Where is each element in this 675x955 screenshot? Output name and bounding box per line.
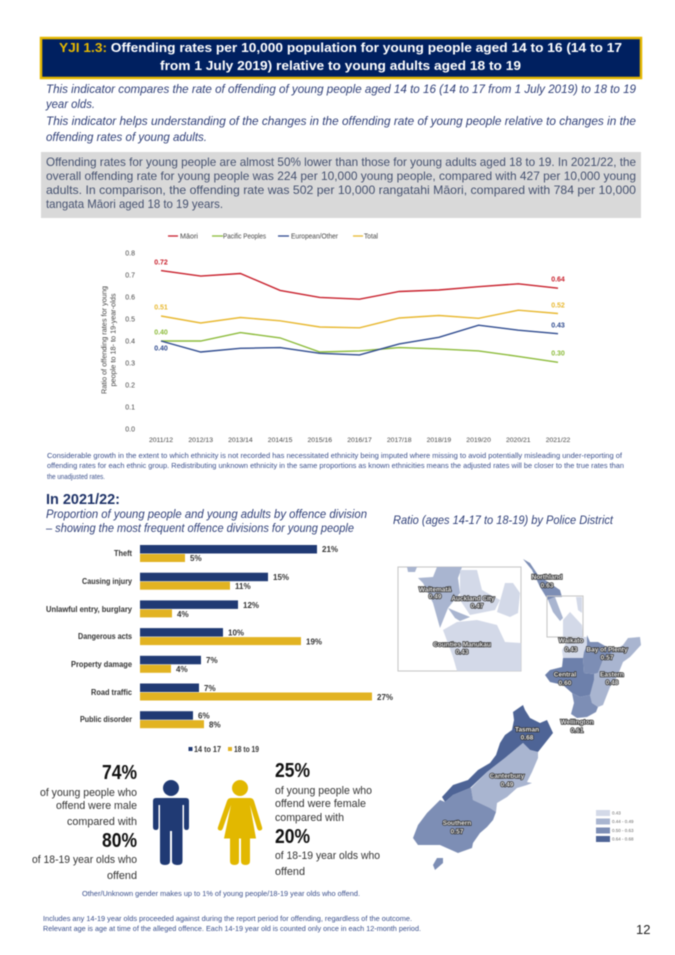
chart note: Considerable growth in the extent to which ethnicity is not recorded has necessitated ethnicity being imputed where missing to avoid potentially misleading under-reporting of [47, 451, 623, 460]
x axis labels: 2021/22 [546, 437, 570, 444]
map subtitle: Ratio (ages 14-17 to 18-19) by Police District [393, 513, 614, 527]
row: Unlawful entry, burglary: 12% [243, 601, 259, 610]
bar chart legend: 14 to 17 [194, 745, 221, 754]
y axis labels: 0.6 [125, 294, 135, 302]
y axis labels: people to 18- to 19-year-olds [110, 293, 118, 386]
line chart: offending ratio by ethnicity [102, 234, 570, 444]
row: Unlawful entry, burglary: 4% [177, 610, 189, 619]
row: Public disorder: Public disorder [80, 715, 132, 724]
data labels: 0.52 [551, 302, 565, 310]
female statistics: of 18-19 year olds who [275, 850, 380, 862]
x axis labels: 2018/19 [427, 437, 451, 444]
female statistics: offend [275, 866, 305, 878]
y axis labels: 0.0 [125, 426, 135, 434]
chart note: offending rates for each ethnic group. Redistributing unknown ethnicity in the same proportions as known ethnicities means the adjusted rates will be closer to the true rates than [47, 461, 624, 470]
bar chart subtitle: Proportion of young people and young adults by offence division [46, 507, 367, 521]
chart legend: Pacific Peoples [223, 234, 266, 240]
row: Road traffic: 27% [377, 693, 393, 702]
data labels: 0.72 [154, 260, 168, 266]
title banner [41, 38, 641, 78]
district labels: 0.49 [501, 782, 514, 788]
female statistics [275, 760, 380, 878]
x axis labels: 2017/18 [387, 437, 412, 444]
district labels: 0.57 [601, 654, 614, 662]
row: Theft: 5% [190, 554, 202, 563]
gender note: Other/Unknown gender makes up to 1% of young people/18-19 year olds who offend. [82, 889, 360, 898]
indicator description [45, 82, 636, 144]
male statistics: offend were male [56, 800, 137, 812]
district labels: Northland [532, 574, 562, 581]
map legend: 0.50 - 0.63 [612, 828, 634, 833]
data labels: 0.64 [551, 276, 565, 284]
row: Property damage [71, 656, 218, 674]
row: Road traffic: 7% [204, 684, 216, 693]
row: Dangerous acts: Dangerous acts [78, 632, 132, 641]
key finding panel: overall offending rate for young people was 224 per 10,000 young people, compared with 427 per 10,000 young [46, 169, 636, 183]
map legend [596, 810, 634, 842]
footnote [43, 914, 421, 933]
key finding panel: tangata Māori aged 18 to 19 years. [46, 197, 223, 211]
inset: Auckland: 0.47 [471, 603, 484, 610]
North Island districts [523, 559, 641, 718]
female statistics: 20% [275, 826, 310, 848]
y axis labels: 0.1 [125, 404, 135, 412]
male statistics: compared with [67, 816, 137, 828]
footnote: Includes any 14-19 year olds proceeded against during the report period for offending, regardless of the outcome. [43, 914, 412, 923]
inset: Auckland: 0.43 [456, 649, 469, 656]
female statistics: of young people who [275, 785, 372, 797]
y axis labels: 0.8 [125, 250, 135, 258]
y axis labels: 0.5 [125, 316, 135, 324]
district labels: 0.48 [606, 680, 619, 686]
data labels: 0.40 [154, 346, 168, 352]
inset: Auckland: Waitematā [419, 586, 452, 594]
chart note [47, 451, 624, 481]
district labels: Wellington [560, 719, 594, 726]
x axis labels: 2016/17 [347, 437, 372, 444]
indicator description: This indicator compares the rate of offending of young people aged 14 to 16 (14 to 17 from 1 July 2019) to 18 to 19 [46, 82, 636, 96]
row: Dangerous acts: 19% [306, 638, 322, 646]
x axis labels: 2019/20 [466, 437, 491, 444]
icon: female figure [218, 780, 262, 865]
chart legend: Total [364, 234, 378, 240]
row: Road traffic [91, 684, 393, 702]
line: Total [161, 310, 558, 328]
female statistics: offend were female [275, 798, 366, 810]
map: ratio by police district [398, 559, 641, 870]
x axis labels: 2015/16 [308, 437, 332, 444]
map legend: 0.64 - 0.68 [612, 836, 634, 842]
map legend: 0.44 - 0.49 [612, 819, 634, 824]
x axis labels [149, 437, 570, 444]
row: Dangerous acts [78, 628, 322, 646]
row: Causing injury: 11% [235, 582, 251, 591]
row: Causing injury: 15% [273, 573, 289, 582]
female statistics: compared with [275, 812, 344, 824]
y axis labels: 0.4 [125, 338, 135, 346]
bar chart: offence divisions [46, 545, 393, 754]
page number: 12 [636, 922, 650, 937]
row: Road traffic: Road traffic [91, 688, 133, 697]
chart legend: Māori [180, 234, 198, 240]
district labels [443, 574, 628, 836]
data labels: 0.43 [551, 322, 565, 330]
female statistics: 25% [275, 760, 310, 782]
male statistics: offend [107, 870, 137, 882]
South Island districts [413, 705, 553, 870]
male statistics [32, 762, 137, 882]
y axis labels: Ratio of offending rates for young [102, 286, 108, 394]
bar chart subtitle: – showing the most frequent offence divisions for young people [45, 521, 354, 535]
icon: male figure [153, 780, 189, 865]
inset: Auckland [398, 567, 521, 671]
row: Theft [114, 545, 338, 563]
district labels: 0.60 [559, 680, 572, 687]
row: Theft: 21% [322, 545, 338, 554]
data labels: 0.30 [551, 350, 565, 358]
footnote: Relevant age is age at time of the alleged offence. Each 14-19 year old is counted only once in each 12-month period. [43, 924, 421, 933]
district labels: 0.68 [521, 734, 534, 742]
district labels: 0.43 [565, 646, 578, 654]
male statistics: 80% [102, 830, 137, 852]
title banner: YJI 1.3: Offending rates per 10,000 population for young people aged 14 to 16 (14 to 17 [59, 41, 622, 55]
district labels: 0.57 [451, 828, 464, 836]
x axis labels: 2020/21 [506, 437, 531, 444]
row: Public disorder [80, 711, 221, 730]
bar chart legend [188, 745, 259, 754]
district labels: Canterbury [490, 773, 525, 780]
row: Dangerous acts: 10% [228, 628, 244, 638]
y axis labels: 0.3 [125, 360, 135, 368]
inset: Auckland: 0.49 [429, 594, 442, 600]
key finding panel [41, 152, 641, 218]
district labels: Southern [443, 820, 471, 827]
district labels: Eastern [600, 672, 624, 678]
row: Unlawful entry, burglary [46, 600, 259, 619]
row: Property damage: 4% [176, 665, 188, 674]
key finding panel: adults. In comparison, the offending rate was 502 per 10,000 rangatahi Māori, compared with 784 per 10,000 [46, 183, 636, 197]
y axis labels: 0.2 [125, 382, 135, 390]
x axis labels: 2011/12 [149, 437, 173, 444]
line: European/Other [161, 325, 558, 355]
section heading: In 2021/22: [46, 491, 120, 508]
inset: Auckland: Counties Manukau [433, 642, 491, 648]
line: Māori [161, 271, 558, 299]
line: Pacific Peoples [161, 333, 558, 362]
chart legend [168, 234, 378, 240]
row: Public disorder: 8% [209, 720, 221, 730]
male statistics: of 18-19 year olds who [32, 854, 137, 866]
y axis labels [102, 250, 135, 434]
x axis labels: 2014/15 [268, 437, 293, 444]
row: Theft: Theft [114, 549, 132, 558]
row: Causing injury: Causing injury [82, 577, 132, 586]
row: Property damage: Property damage [71, 660, 133, 669]
chart legend: European/Other [291, 234, 339, 240]
district labels: 0.63 [541, 582, 554, 590]
district labels: Central [554, 672, 576, 678]
y axis labels: 0.7 [125, 272, 135, 280]
male statistics: of young people who [40, 787, 137, 799]
bar chart legend: 18 to 19 [234, 745, 259, 754]
row: Property damage: 7% [206, 656, 218, 665]
data labels: 0.51 [154, 304, 168, 312]
district labels: Tasman [515, 726, 539, 734]
male statistics: 74% [102, 762, 137, 784]
district labels: 0.61 [571, 728, 584, 734]
inset: Auckland: Auckland City [451, 596, 495, 602]
data labels: 0.40 [154, 330, 168, 336]
indicator description: year olds. [45, 97, 95, 111]
chart note: the unadjusted rates. [47, 472, 105, 481]
data labels [154, 260, 565, 358]
row: Public disorder: 6% [198, 712, 210, 720]
x axis labels: 2012/13 [188, 437, 213, 444]
district labels: Waikato [559, 638, 583, 644]
title banner: from 1 July 2019) relative to young adults aged 18 to 19 [160, 59, 521, 73]
key finding panel: Offending rates for young people are almost 50% lower than those for young adults aged 18 to 19. In 2021/22, the [46, 155, 636, 169]
row: Unlawful entry, burglary: Unlawful entry, burglary [46, 605, 133, 614]
row: Causing injury [82, 573, 289, 591]
bar chart subtitle [45, 507, 367, 535]
indicator description: offending rates of young adults. [46, 130, 207, 144]
district labels: Bay of Plenty [586, 646, 628, 654]
x axis labels: 2013/14 [228, 437, 253, 444]
map legend: 0.43 [612, 810, 621, 816]
indicator description: This indicator helps understanding of the changes in the offending rate of young people relative to changes in the [46, 114, 636, 128]
